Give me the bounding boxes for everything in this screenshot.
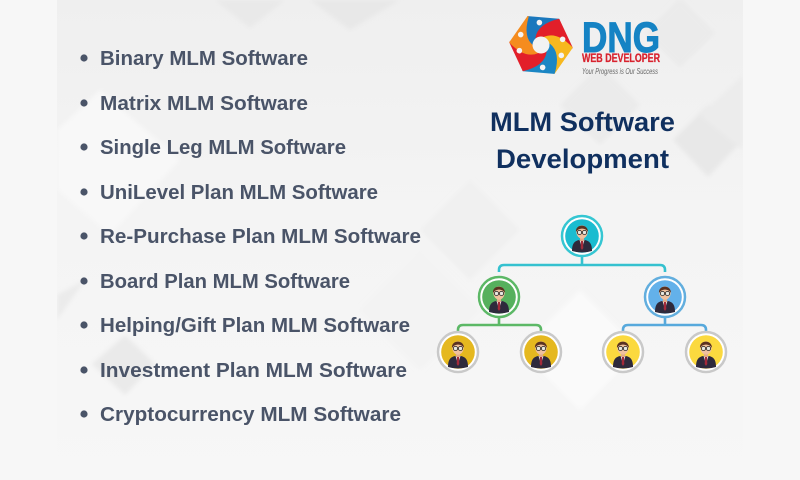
logo wordmark DNG: DNG — [582, 14, 660, 62]
title: Development — [496, 144, 669, 174]
central background panel — [58, 0, 743, 392]
list item 6: Board Plan MLM Software — [100, 270, 350, 293]
connectors: right branch — [623, 318, 706, 332]
node: left member 2 — [521, 332, 561, 372]
logo subtitle: WEB DEVELOPER — [582, 53, 661, 65]
connectors: top level — [499, 254, 665, 272]
list item 1: Binary MLM Software — [100, 47, 308, 70]
node: left manager — [479, 277, 519, 317]
bullet list — [80, 47, 421, 426]
node: top manager — [562, 216, 602, 256]
node: right member 2 — [686, 332, 726, 372]
connectors: left branch — [458, 318, 541, 332]
org chart — [438, 216, 726, 372]
icon: pinwheel hexagon — [488, 0, 594, 97]
node: left member 1 — [438, 332, 478, 372]
node: right member 1 — [603, 332, 643, 372]
node: right manager — [645, 277, 685, 317]
list item 9: Cryptocurrency MLM Software — [100, 403, 401, 426]
title — [490, 107, 675, 174]
list item 7: Helping/Gift Plan MLM Software — [100, 314, 410, 337]
list item 4: UniLevel Plan MLM Software — [100, 181, 378, 204]
list item 2: Matrix MLM Software — [100, 92, 308, 115]
title: MLM Software — [490, 107, 675, 137]
list item 5: Re-Purchase Plan MLM Software — [100, 225, 421, 248]
list item 3: Single Leg MLM Software — [100, 136, 346, 159]
logo tagline: Your Progress is Our Success — [582, 67, 658, 76]
logo — [488, 0, 661, 97]
list item 8: Investment Plan MLM Software — [100, 359, 407, 382]
